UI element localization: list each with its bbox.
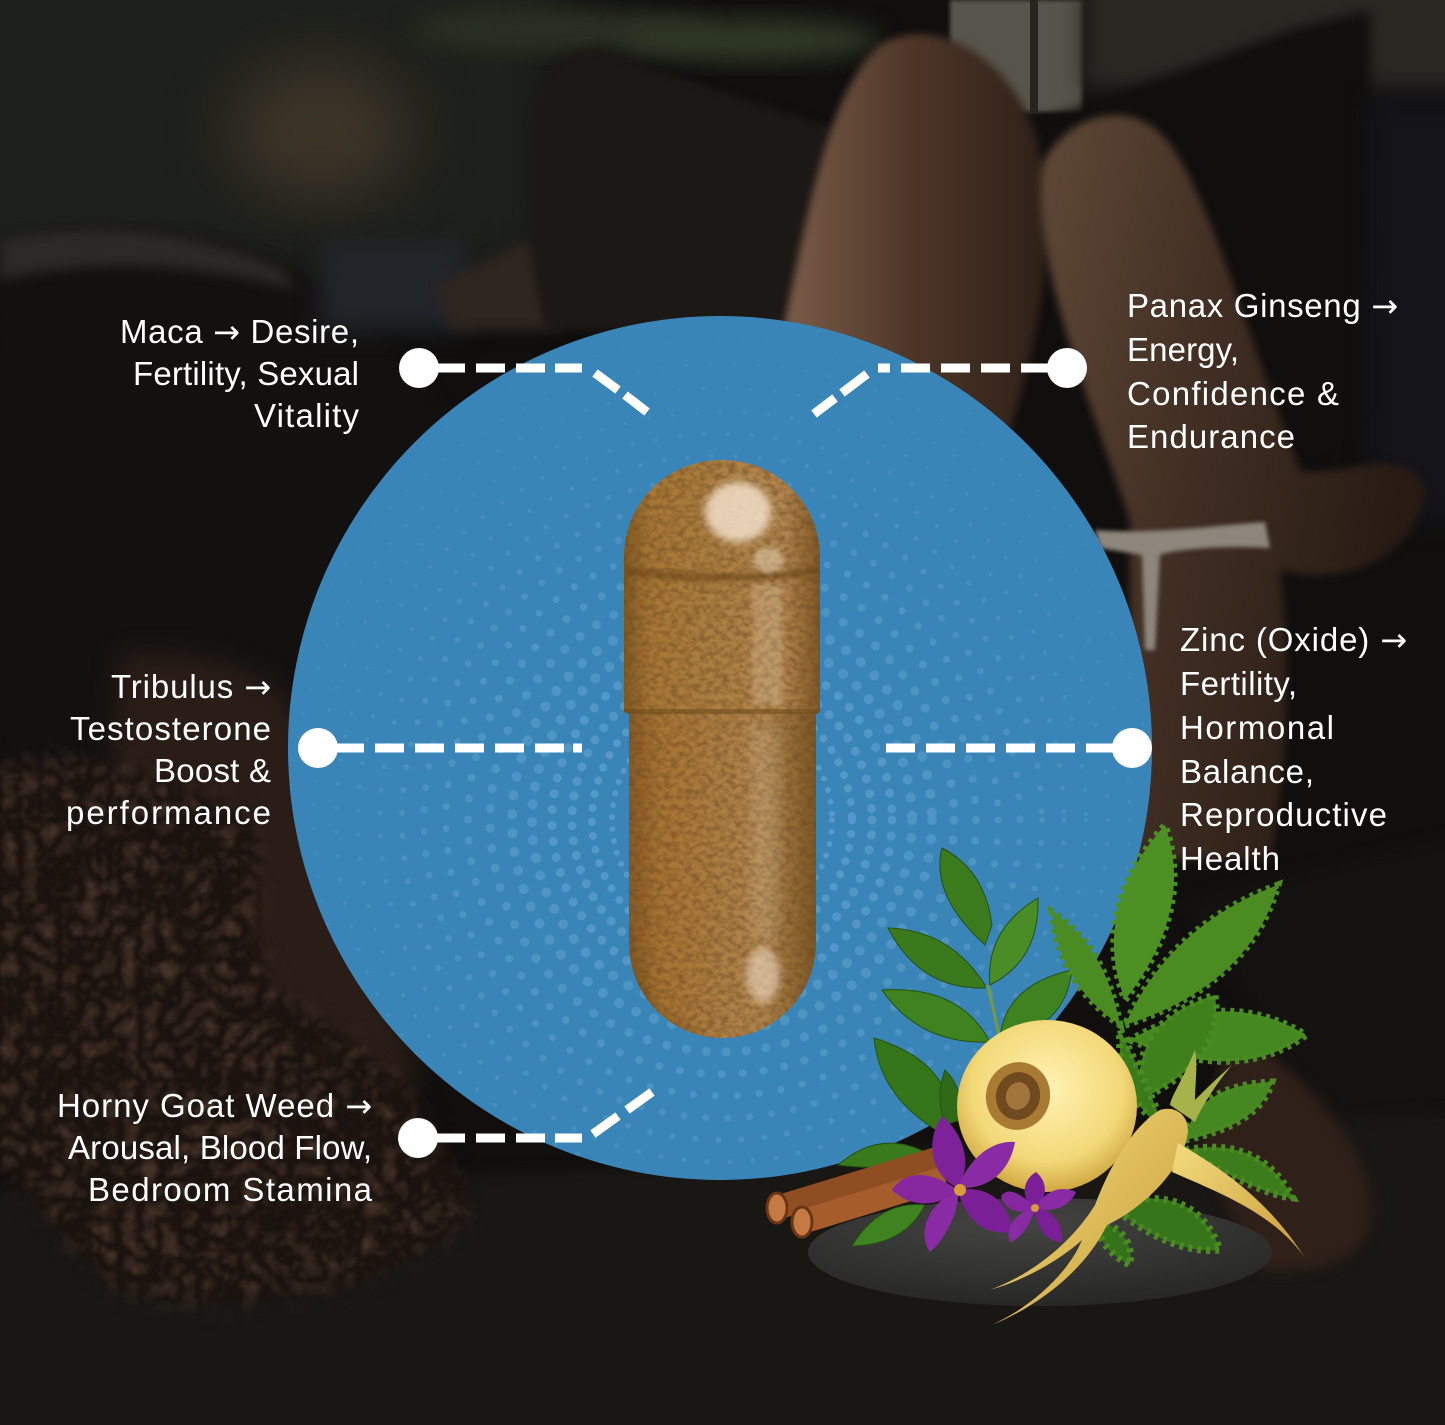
text: Maca benefits: Maca → Desire,: [120, 313, 359, 351]
text: Zinc benefits: Hormonal: [1180, 709, 1334, 746]
capsule with herbal powder: [620, 455, 824, 1045]
text: Tribulus benefits: Boost &: [154, 752, 271, 789]
text: Horny Goat Weed benefits: [57, 1087, 373, 1208]
text: Zinc benefits: Balance,: [1180, 753, 1314, 790]
text: Tribulus benefits: [66, 668, 271, 831]
text: Horny Goat Weed benefits: Horny Goat Weed →: [57, 1087, 372, 1125]
callout: Maca connector: [399, 348, 647, 412]
text: Horny Goat Weed benefits: Arousal, Blood Flow,: [68, 1129, 372, 1166]
text: Tribulus benefits: Tribulus →: [111, 668, 271, 706]
text: Zinc benefits: [1180, 621, 1407, 877]
icon: serrated leaves: [1052, 825, 1306, 1265]
text: Panax Ginseng benefits: [1127, 287, 1398, 455]
text: Maca benefits: [120, 313, 360, 434]
illustration: herbs, maca root, cinnamon and flowers on a stone: [767, 825, 1306, 1325]
text: Tribulus benefits: performance: [66, 794, 271, 831]
text: Panax Ginseng benefits: Energy,: [1127, 331, 1239, 368]
text: Maca benefits: Fertility, Sexual: [133, 355, 359, 392]
text: Horny Goat Weed benefits: Bedroom Stamina: [88, 1171, 373, 1208]
panel: blue circle with halftone rings: [288, 316, 1152, 1180]
text: Panax Ginseng benefits: Confidence &: [1127, 375, 1339, 412]
callout: Horny Goat Weed connector: [398, 1092, 652, 1158]
text: Zinc benefits: Reproductive: [1180, 796, 1387, 833]
icon: large purple flower: [892, 1116, 1015, 1252]
text: Maca benefits: Vitality: [254, 397, 360, 434]
icon: smooth leaves: [838, 848, 1072, 1246]
text: Tribulus benefits: Testosterone: [70, 710, 271, 747]
callout: Panax Ginseng connector: [814, 348, 1087, 414]
icon: ginseng root: [990, 1050, 1305, 1325]
icon: cinnamon sticks: [767, 1158, 945, 1237]
text: Zinc benefits: Health: [1180, 840, 1280, 877]
icon: stone: [808, 1198, 1272, 1306]
text: Zinc benefits: Zinc (Oxide) →: [1180, 621, 1407, 659]
callout: Zinc connector: [886, 728, 1152, 768]
text: Panax Ginseng benefits: Endurance: [1127, 418, 1295, 455]
icon: maca bulb: [957, 1020, 1137, 1192]
text: Zinc benefits: Fertility,: [1180, 665, 1297, 702]
callout: Tribulus connector: [298, 728, 582, 768]
icon: small purple flower: [1001, 1172, 1076, 1242]
text: Panax Ginseng benefits: Panax Ginseng →: [1127, 287, 1398, 325]
